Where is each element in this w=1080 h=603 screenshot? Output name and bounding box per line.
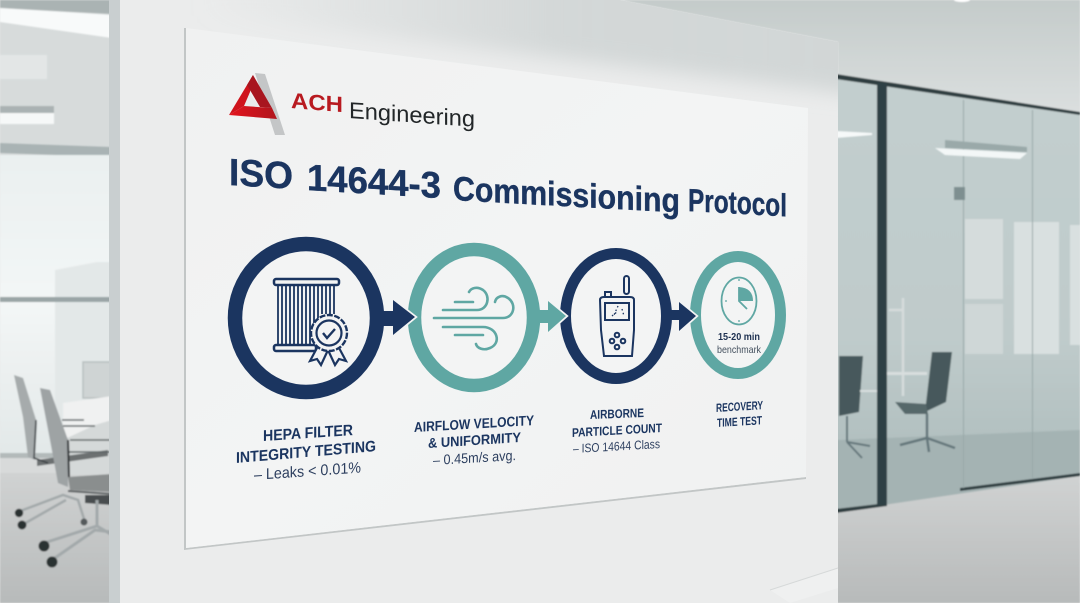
step 4: recovery time ring bbox=[696, 256, 780, 374]
title bbox=[229, 152, 787, 223]
label: airflow velocity and uniformity bbox=[414, 412, 535, 468]
label: recovery time test: RECOVERY bbox=[716, 398, 763, 415]
step 1: HEPA filter ring bbox=[235, 244, 377, 392]
board: commissioning protocol panel bbox=[184, 28, 808, 550]
wordmark bbox=[291, 88, 475, 132]
benchmark text: 15-20 min bbox=[718, 331, 760, 343]
icon: wind lines bbox=[434, 288, 513, 349]
arrow: step 2 to step 3 bbox=[530, 301, 566, 332]
icon: clock bbox=[722, 278, 756, 324]
icon: red and grey A mark bbox=[229, 73, 285, 135]
arrow: step 1 to step 2 bbox=[380, 300, 415, 335]
icon: handheld particle counter bbox=[600, 276, 634, 356]
label: airflow velocity and uniformity: – 0.45m/s avg. bbox=[433, 447, 516, 468]
title: 14644-3 bbox=[307, 156, 441, 206]
background: white wall bbox=[109, 0, 860, 603]
logo: ACH Engineering bbox=[229, 73, 475, 135]
chair 2 bbox=[38, 388, 112, 568]
step 3: particle counter ring bbox=[566, 254, 666, 378]
icon: HEPA filter with certified badge bbox=[274, 279, 347, 365]
background: left meeting room bbox=[0, 0, 112, 603]
chair 1 bbox=[14, 375, 110, 530]
label: recovery time test: TIME TEST bbox=[717, 413, 762, 430]
label: HEPA filter integrity testing bbox=[236, 422, 376, 484]
background: right glass room bbox=[620, 0, 1080, 603]
label: HEPA filter integrity testing: – Leaks < 0.01% bbox=[254, 460, 361, 484]
label: airflow velocity and uniformity: & UNIFORMITY bbox=[428, 429, 522, 451]
arrow: step 3 to step 4 bbox=[668, 302, 696, 331]
label: airborne particle count: PARTICLE COUNT bbox=[572, 421, 662, 440]
step 2: airflow ring bbox=[414, 250, 534, 386]
title: Protocol bbox=[688, 182, 787, 223]
label: airborne particle count: AIRBORNE bbox=[590, 406, 644, 422]
label: recovery time test bbox=[716, 398, 763, 430]
label: airflow velocity and uniformity: AIRFLOW VELOCITY bbox=[414, 412, 535, 435]
label: HEPA filter integrity testing: HEPA FILTER bbox=[263, 422, 353, 445]
label: airborne particle count: – ISO 14644 Class bbox=[573, 437, 660, 456]
benchmark text: benchmark bbox=[717, 344, 762, 356]
title: ISO bbox=[229, 152, 293, 198]
benchmark text bbox=[717, 331, 762, 356]
label: airborne particle count bbox=[572, 406, 662, 456]
wordmark: ACH bbox=[291, 88, 343, 117]
title: Commissioning bbox=[453, 170, 680, 220]
label: HEPA filter integrity testing: INTEGRITY TESTING bbox=[236, 438, 376, 467]
wordmark: Engineering bbox=[349, 97, 475, 132]
